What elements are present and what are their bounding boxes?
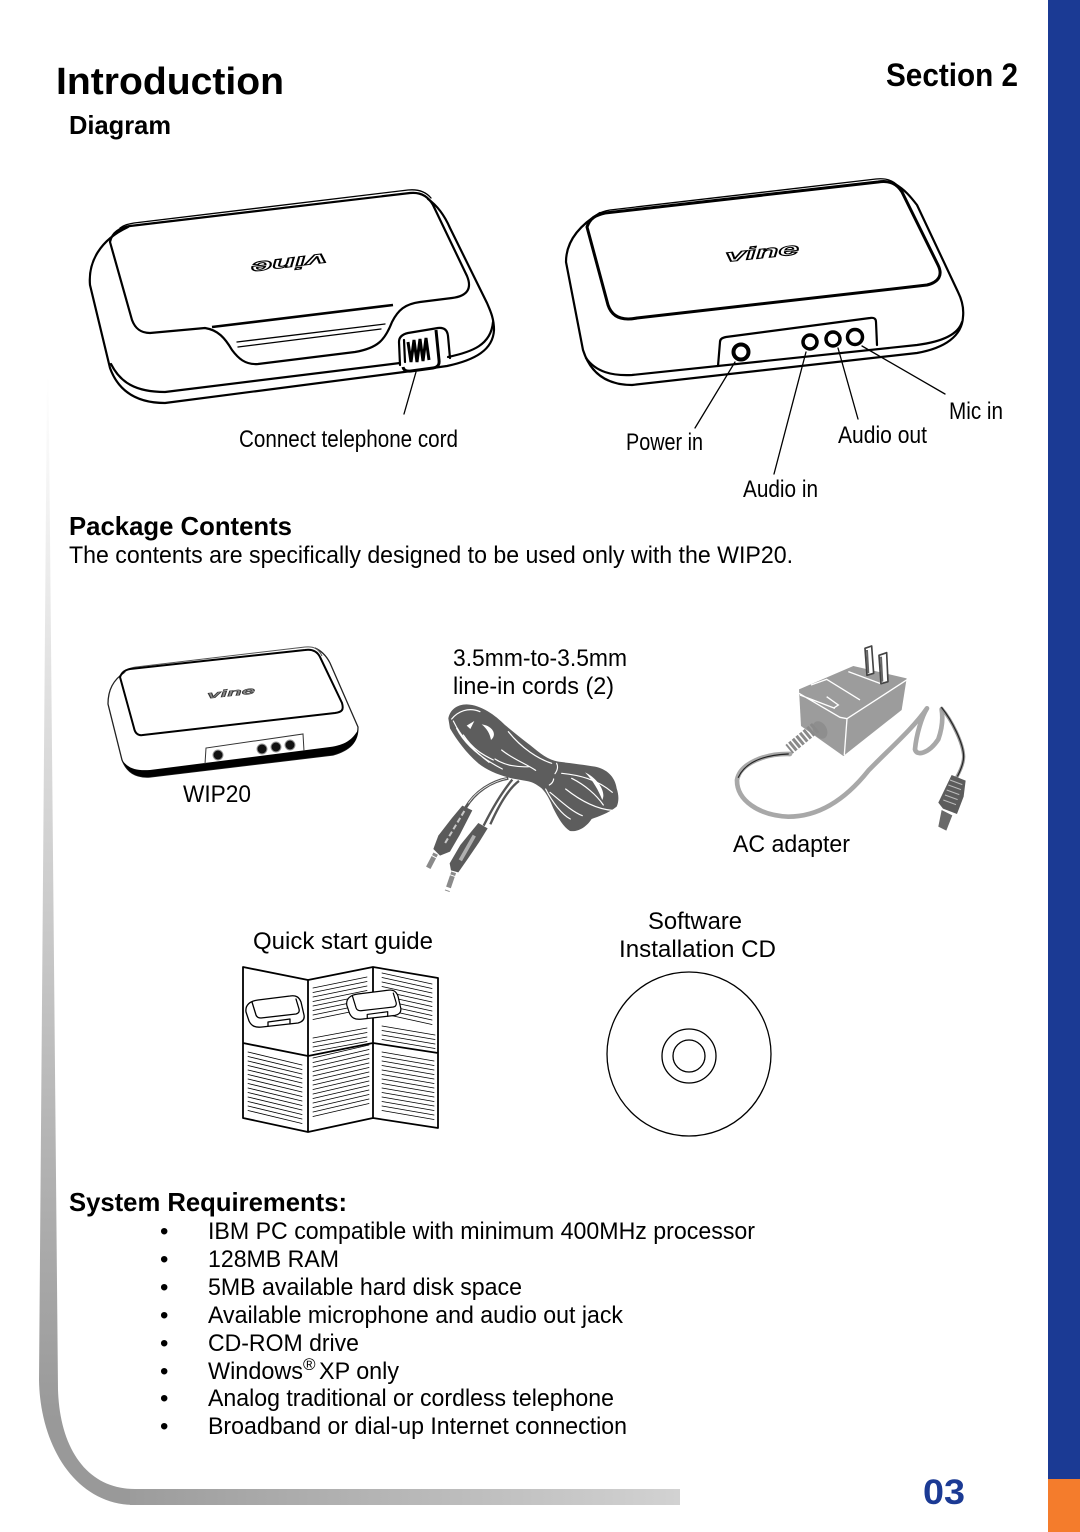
product: installation CD bbox=[607, 972, 771, 1136]
callout: power in: Power in bbox=[626, 429, 703, 456]
device diagram: rear view bbox=[566, 179, 963, 385]
guide illustration: device left bbox=[246, 996, 304, 1027]
requirements list: Windows bbox=[208, 1358, 303, 1385]
callout: mic in: Mic in bbox=[949, 398, 1003, 425]
label: line-in cords: 3.5mm-to-3.5mm bbox=[453, 645, 627, 672]
requirements list: • bbox=[160, 1218, 168, 1245]
label: software installation CD bbox=[619, 908, 776, 963]
label: WIP20: WIP20 bbox=[183, 781, 251, 808]
package intro text: The contents are specifically designed to be used only with the WIP20. bbox=[69, 542, 793, 569]
requirements list: 128MB RAM bbox=[208, 1246, 339, 1273]
page number: 03 bbox=[923, 1473, 965, 1512]
requirements list: Broadband or dial-up Internet connection bbox=[208, 1413, 627, 1440]
callout: connect telephone cord bbox=[239, 372, 458, 453]
label: quick start guide: Quick start guide bbox=[253, 928, 433, 955]
callout: mic in bbox=[862, 346, 1003, 425]
page frame: grey gradient corner bbox=[39, 375, 680, 1505]
callout: connect telephone cord: Connect telephone cord bbox=[239, 426, 458, 453]
label: AC adapter: AC adapter bbox=[733, 831, 850, 858]
product: AC adapter bbox=[737, 646, 966, 831]
product: quick start guide bbox=[243, 967, 438, 1132]
requirements list: • bbox=[160, 1413, 168, 1440]
requirements list: • bbox=[160, 1358, 168, 1385]
rear ports bbox=[205, 734, 304, 764]
rear port panel bbox=[718, 318, 877, 366]
requirements list: IBM PC compatible with minimum 400MHz processor bbox=[208, 1218, 755, 1245]
sidebar: orange tab bbox=[1048, 1479, 1080, 1532]
label: software installation CD: Software bbox=[648, 908, 742, 935]
requirements list: Analog traditional or cordless telephone bbox=[208, 1385, 614, 1412]
product: line-in cords bbox=[427, 704, 618, 896]
requirements list: • bbox=[160, 1330, 168, 1357]
cord tails bbox=[466, 778, 519, 826]
callout: audio in bbox=[743, 352, 818, 503]
device diagram: front view bbox=[90, 190, 494, 403]
callout: audio out: Audio out bbox=[838, 422, 927, 449]
device logo: vine bbox=[250, 249, 328, 278]
requirements list: • bbox=[160, 1302, 168, 1329]
plug one bbox=[427, 806, 472, 870]
requirements list bbox=[160, 1218, 755, 1440]
sidebar: blue strip bbox=[1048, 0, 1080, 1479]
plug two bbox=[446, 823, 488, 896]
label: line-in cords: line-in cords (2) bbox=[453, 673, 614, 700]
requirements list: 5MB available hard disk space bbox=[208, 1274, 522, 1301]
callout: audio out bbox=[838, 348, 927, 449]
device logo: vine bbox=[207, 685, 257, 701]
guide illustration: device right bbox=[347, 990, 401, 1019]
requirements list: • bbox=[160, 1246, 168, 1273]
title: Introduction bbox=[56, 61, 284, 103]
strain relief bbox=[789, 719, 830, 749]
heading: diagram: Diagram bbox=[69, 112, 171, 140]
DC plug bbox=[938, 775, 966, 831]
callout: power in bbox=[626, 362, 735, 456]
adapter body bbox=[799, 646, 907, 756]
requirements list: ® bbox=[303, 1355, 316, 1374]
label: software installation CD: Installation CD bbox=[619, 936, 776, 963]
heading: system requirements: System Requirements: bbox=[69, 1189, 347, 1217]
requirements list: CD-ROM drive bbox=[208, 1330, 359, 1357]
requirements list: • bbox=[160, 1385, 168, 1412]
requirements list: XP only bbox=[319, 1358, 399, 1385]
telephone port bbox=[399, 328, 450, 371]
label: line-in cords bbox=[453, 645, 627, 700]
requirements list: • bbox=[160, 1274, 168, 1301]
section label: Section 2 bbox=[886, 57, 1018, 93]
product: WIP20 unit bbox=[108, 647, 358, 777]
device logo: vine bbox=[724, 239, 800, 266]
adapter cord bbox=[737, 708, 964, 817]
heading: package contents: Package Contents bbox=[69, 513, 292, 541]
callout: audio in: Audio in bbox=[743, 476, 818, 503]
requirements list: Available microphone and audio out jack bbox=[208, 1302, 624, 1329]
